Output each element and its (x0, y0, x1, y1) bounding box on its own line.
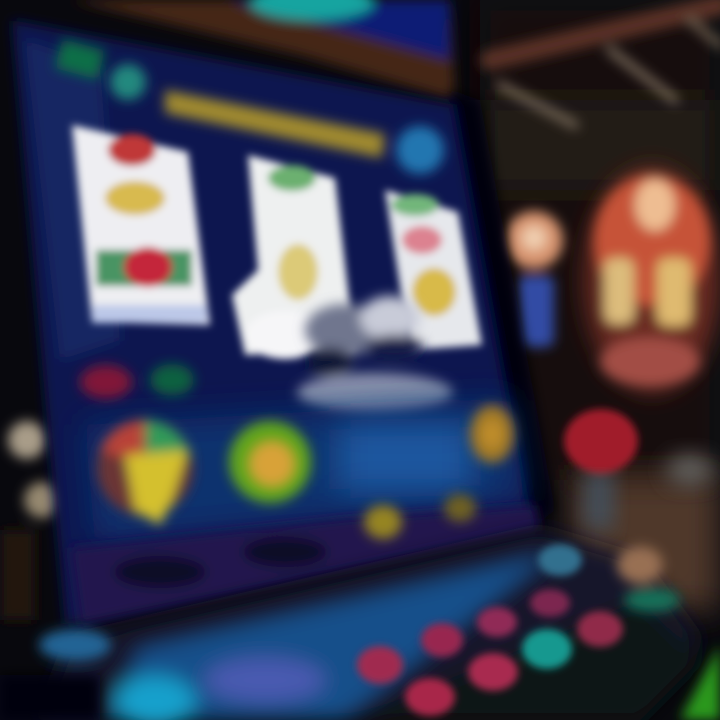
background: ceiling rafters (490, 5, 720, 125)
console buttons (357, 544, 623, 716)
cluster of white coins below reels (297, 296, 453, 413)
cabinet top header with gold title bar (55, 39, 444, 174)
small gold lights (364, 494, 476, 539)
reel panel 3 (385, 190, 482, 350)
green and yellow round icon (229, 421, 311, 503)
machine cabinet top band (70, 0, 455, 100)
multicolour wheel icon (97, 420, 193, 525)
purple bottom control strip (70, 505, 540, 625)
right side objects by the console (617, 546, 720, 720)
left side objects (0, 421, 60, 620)
lower panel (85, 400, 525, 540)
reel panel 1 (72, 125, 210, 325)
red and green indicator lights (80, 364, 194, 399)
background: room right side (480, 0, 720, 610)
lamp: small lantern with blue base (505, 211, 563, 347)
red ball joystick (564, 409, 714, 530)
machine cabinet body (12, 20, 555, 625)
left blue console edge (0, 629, 111, 720)
reel panel 2 (232, 155, 355, 359)
lamp: large round lantern (584, 168, 720, 392)
gold coin right (470, 405, 514, 463)
machine console deck (40, 530, 700, 720)
